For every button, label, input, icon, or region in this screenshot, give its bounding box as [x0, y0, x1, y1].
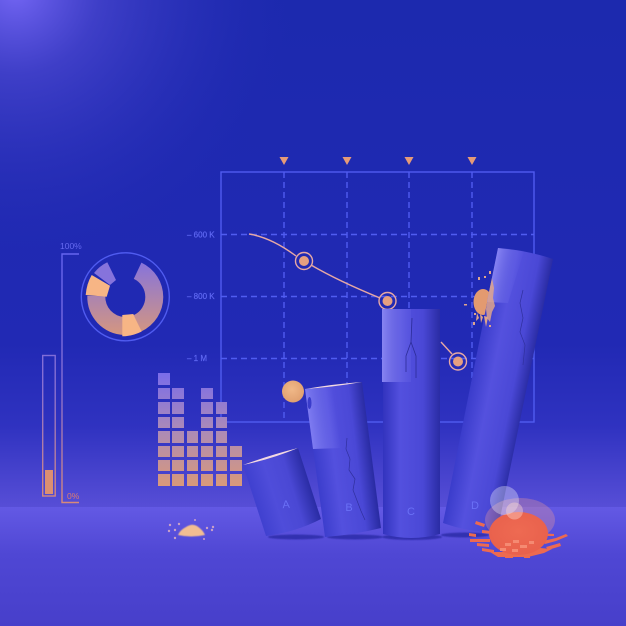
splash fragments	[469, 521, 568, 558]
splash pixel shading	[500, 540, 534, 552]
donut chart	[81, 253, 169, 341]
shadows under bars	[268, 532, 489, 540]
axis labels: – 1 M	[187, 354, 207, 363]
bar D body	[443, 248, 553, 533]
bar C body	[383, 309, 440, 538]
floating ball	[282, 380, 304, 402]
bar A top rim	[243, 448, 298, 465]
line chart grid	[221, 172, 534, 422]
dashed grid lines	[221, 172, 534, 422]
bar B body	[305, 382, 381, 537]
splash halo	[485, 498, 555, 542]
sand mound	[178, 525, 205, 536]
splattered ball behind bar D	[474, 289, 492, 315]
data marker 2	[379, 292, 396, 310]
sand pile	[168, 519, 214, 540]
scale label bottom: 0%	[67, 491, 80, 501]
scale label top: 100%	[60, 241, 82, 251]
chart frame	[221, 172, 534, 422]
donut upper segment	[94, 262, 116, 285]
bar B dent	[308, 397, 312, 409]
splash blob	[489, 512, 548, 555]
bar A body	[243, 448, 321, 536]
axis labels: – 800 K	[187, 292, 215, 301]
donut outline	[81, 253, 169, 341]
red splash	[469, 486, 568, 558]
trend line	[249, 234, 466, 370]
bar D letter: D	[471, 500, 479, 512]
bracket scale	[62, 254, 79, 502]
donut main segment	[134, 263, 163, 331]
bar B letter: B	[345, 502, 353, 514]
floor	[0, 507, 626, 626]
sand grains	[168, 519, 214, 540]
bar C crack	[406, 318, 416, 378]
equalizer squares	[158, 373, 242, 486]
bar B light patch	[305, 387, 341, 449]
data marker 3	[450, 353, 466, 370]
axis labels	[187, 230, 215, 363]
bar B top rim	[305, 382, 362, 389]
bar C	[382, 309, 440, 538]
translucent bubble small	[506, 502, 523, 520]
donut highlight bottom	[122, 314, 142, 336]
bar A letter: A	[282, 499, 291, 511]
bar D crack	[520, 290, 525, 365]
donut lower segment	[87, 296, 125, 335]
gauge outline	[43, 356, 55, 496]
bar C letter: C	[407, 506, 415, 518]
translucent bubble large	[490, 486, 519, 515]
axis labels: – 600 K	[187, 230, 215, 240]
bar A	[243, 448, 321, 536]
splatter over bar D	[464, 271, 495, 327]
gauge fill	[45, 470, 53, 494]
donut highlight left	[86, 275, 110, 297]
progress gauge	[43, 241, 82, 502]
bar C light patch	[382, 309, 411, 382]
top triangle markers	[280, 157, 476, 165]
bar B crack	[346, 438, 365, 520]
data marker 1	[296, 252, 312, 270]
bar D	[443, 248, 553, 533]
bar B	[305, 382, 381, 537]
bar D light patch	[487, 248, 524, 303]
